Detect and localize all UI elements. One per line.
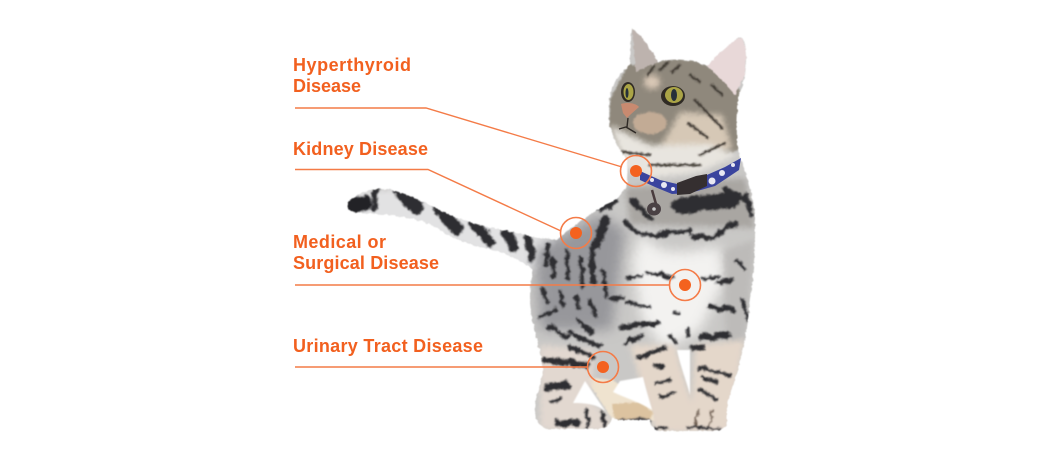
forehead light patch xyxy=(644,75,660,89)
label: Hyperthyroid Disease xyxy=(293,55,411,96)
nose xyxy=(621,103,639,118)
neck and shoulder fur xyxy=(625,178,755,228)
collar tag xyxy=(647,190,661,216)
front leg fur tan xyxy=(630,340,745,432)
label: Medical or Surgical Disease: Medical or xyxy=(293,232,386,252)
eye left xyxy=(621,82,635,102)
label: Hyperthyroid Disease: Disease xyxy=(293,76,361,96)
label: Hyperthyroid Disease: Hyperthyroid xyxy=(293,55,411,75)
cat illustration xyxy=(340,20,760,440)
hind foot tan xyxy=(612,402,653,420)
face markings xyxy=(622,62,725,165)
label: Medical or Surgical Disease: Surgical Disease xyxy=(293,253,439,273)
chin and neck white xyxy=(610,125,738,178)
gaps between legs xyxy=(573,350,690,412)
label: Kidney Disease: Kidney Disease xyxy=(293,139,428,159)
eye right xyxy=(661,86,685,106)
label: Urinary Tract Disease: Urinary Tract Disease xyxy=(293,336,483,356)
head fur xyxy=(608,59,740,156)
ear right xyxy=(707,37,746,95)
leader and marker: kidney xyxy=(295,170,592,248)
collar xyxy=(640,158,741,194)
cat body with fur xyxy=(340,20,760,440)
chest and belly white fur xyxy=(632,232,724,350)
label: Medical or Surgical Disease xyxy=(293,232,439,273)
collar paw prints xyxy=(650,163,735,191)
rear paw and thigh xyxy=(540,345,612,432)
cheek fur xyxy=(660,112,732,158)
infographic: cat disease locations xyxy=(294,28,756,432)
tail fur xyxy=(350,190,560,272)
ear left xyxy=(632,29,658,72)
mouth xyxy=(619,118,636,133)
collar buckle xyxy=(677,174,707,195)
right side fur xyxy=(725,240,755,345)
flank grey fur xyxy=(535,215,625,330)
tail and body stripes xyxy=(352,190,752,428)
leader and marker: medical or surgical xyxy=(295,270,700,300)
leader and marker: urinary tract xyxy=(295,352,618,382)
hind leg cream xyxy=(585,377,655,420)
leader and marker: hyperthyroid xyxy=(295,108,652,186)
muzzle xyxy=(633,112,667,134)
